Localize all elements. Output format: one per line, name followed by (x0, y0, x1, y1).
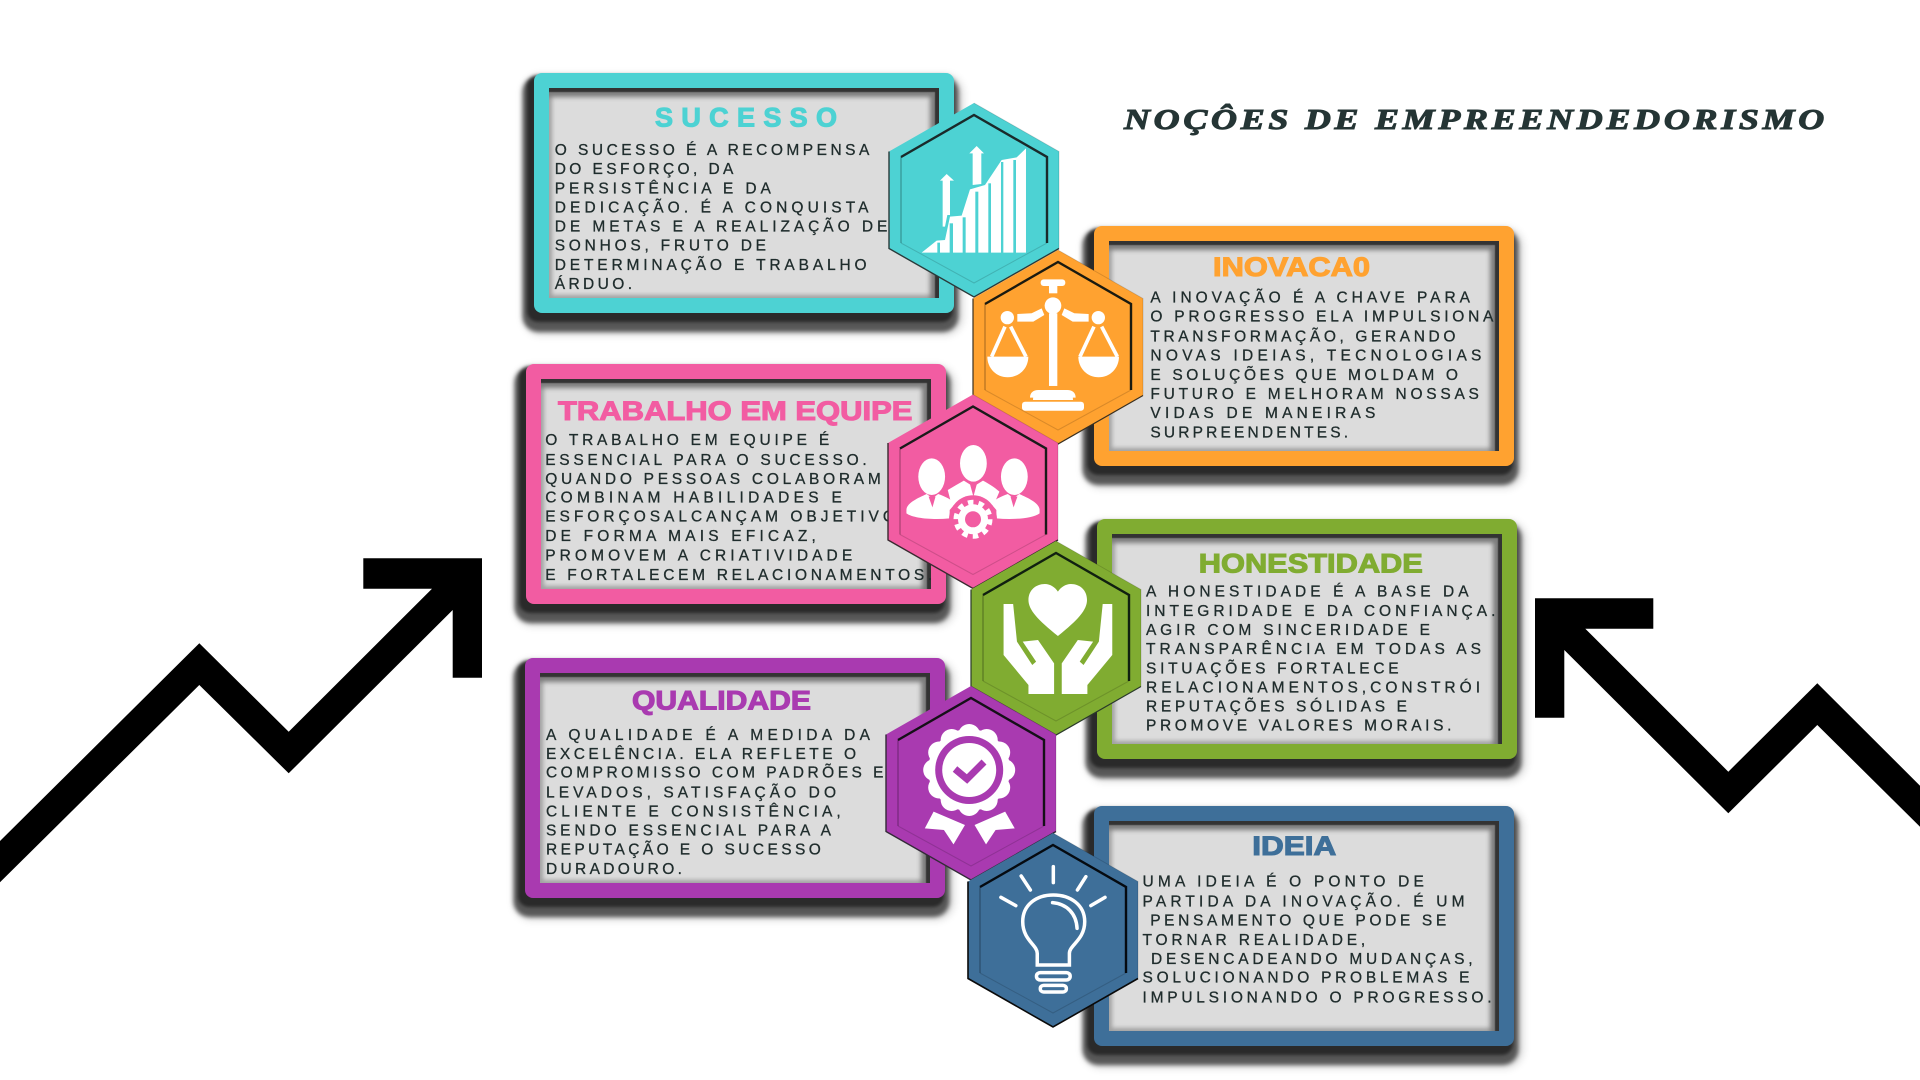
text block: ideia: TORNAR REALIDADE, (1142, 932, 1365, 949)
icon: rising bar chart (922, 146, 1026, 253)
text block: qualidade: LEVADOS, SATISFAÇÃO DO (546, 785, 836, 802)
text block: honestidade: RELACIONAMENTOS,CONSTRÓI (1146, 680, 1480, 697)
text block: honestidade: A HONESTIDADE É A BASE DA (1146, 584, 1469, 601)
text block: inovação: SURPREENDENTES. (1150, 424, 1348, 441)
hexagon: trabalho em equipe (888, 394, 1058, 588)
text block: ideia: IMPULSIONANDO O PROGRESSO. (1142, 990, 1492, 1007)
text block: trabalho em equipe: DE FORMA MAIS EFICAZ, (545, 528, 816, 545)
text block: sucesso (555, 142, 887, 293)
text block: inovação: FUTURO E MELHORAM NOSSAS (1150, 386, 1479, 403)
text block: sucesso: PERSISTÊNCIA E DA (555, 181, 772, 198)
text block: sucesso: DO ESFORÇO, DA (555, 161, 734, 178)
text block: honestidade (1146, 584, 1495, 735)
icon: team with gear (906, 445, 1040, 543)
text block: honestidade: REPUTAÇÕES SÓLIDAS E (1146, 699, 1407, 716)
heading: ideia: IDEIA (1252, 831, 1336, 861)
icon: quality rosette (923, 724, 1015, 844)
text block: trabalho em equipe: QUANDO PESSOAS COLABORAM (545, 471, 881, 488)
text block: inovação: TRANSFORMAÇÃO, GERANDO (1150, 329, 1455, 346)
text block: qualidade: SENDO ESSENCIAL PARA A (546, 823, 832, 840)
text block: qualidade: CLIENTE E CONSISTÊNCIA, (546, 804, 841, 821)
text block: qualidade: EXCELÊNCIA. ELA REFLETE O (546, 746, 856, 763)
panel: ideia (1094, 806, 1514, 1046)
heading: qualidade: QUALIDADE (632, 685, 811, 715)
text block: qualidade (546, 727, 884, 878)
hexagon: sucesso (889, 103, 1059, 297)
text block: ideia: SOLUCIONANDO PROBLEMAS E (1142, 970, 1470, 987)
text block: trabalho em equipe: O TRABALHO EM EQUIPE É (545, 432, 829, 449)
text block: ideia: DESENCADEANDO MUDANÇAS, (1151, 951, 1472, 968)
icon: scales base (1022, 390, 1084, 411)
panel: qualidade (525, 658, 945, 898)
text block: trabalho em equipe: ESFORÇOSALCANÇAM OBJETIVOS (545, 509, 909, 526)
hexagon: inovação (973, 250, 1143, 444)
hexagon: honestidade (971, 541, 1141, 735)
heading: trabalho em equipe: TRABALHO EM EQUIPE (558, 396, 912, 426)
text block: sucesso: SONHOS, FRUTO DE (555, 238, 766, 255)
text block: qualidade: COMPROMISSO COM PADRÕES E (546, 765, 884, 782)
icon: heart in hands (1004, 584, 1112, 694)
text block: ideia (1142, 874, 1492, 1007)
panel: sucesso (534, 73, 954, 313)
text block: inovação: A INOVAÇÃO É A CHAVE PARA (1150, 290, 1471, 307)
text block: trabalho em equipe: COMBINAM HABILIDADES E (545, 490, 842, 507)
heading: honestidade: HONESTIDADE (1199, 549, 1423, 579)
text block: honestidade: INTEGRIDADE E DA CONFIANÇA. (1146, 603, 1495, 620)
text block: sucesso: ÁRDUO. (555, 276, 632, 293)
text block: honestidade: PROMOVE VALORES MORAIS. (1146, 718, 1451, 735)
icon: scales of justice (987, 279, 1119, 398)
text block: inovação (1150, 290, 1494, 441)
text block: ideia: PENSAMENTO QUE PODE SE (1150, 913, 1446, 930)
text block: sucesso: DEDICAÇÃO. É A CONQUISTA (555, 200, 869, 217)
text block: honestidade: SITUAÇÕES FORTALECE (1146, 660, 1399, 677)
text block: inovação: E SOLUÇÕES QUE MOLDAM O (1150, 367, 1458, 384)
text block: trabalho em equipe: E FORTALECEM RELACIONAMENTOS. (545, 567, 932, 584)
text block: inovação: O PROGRESSO ELA IMPULSIONA (1150, 309, 1494, 326)
text block: inovação: NOVAS IDEIAS, TECNOLOGIAS (1150, 348, 1481, 365)
panel: honestidade (1097, 519, 1517, 759)
text block: sucesso: DE METAS E A REALIZAÇÃO DE (555, 219, 887, 236)
text block: trabalho em equipe (545, 432, 932, 584)
text block: trabalho em equipe: ESSENCIAL PARA O SUCESSO. (545, 452, 867, 469)
text block: honestidade: TRANSPARÊNCIA EM TODAS AS (1146, 641, 1481, 658)
text block: qualidade: A QUALIDADE É A MEDIDA DA (546, 727, 871, 744)
hexagon: ideia (968, 833, 1138, 1027)
title: NOÇÔES DE EMPREENDEDORISMO (1123, 103, 1828, 136)
heading: sucesso: SUCESSO (655, 103, 837, 133)
text block: honestidade: AGIR COM SINCERIDADE E (1146, 622, 1430, 639)
text block: sucesso: O SUCESSO É A RECOMPENSA (555, 142, 870, 159)
text block: inovação: VIDAS DE MANEIRAS (1150, 405, 1375, 422)
text block: qualidade: DURADOURO. (546, 861, 682, 878)
text block: trabalho em equipe: PROMOVEM A CRIATIVIDADE (545, 548, 852, 565)
panel: trabalho em equipe (526, 364, 946, 604)
icon: light bulb (1001, 867, 1105, 992)
hexagon: qualidade (886, 686, 1056, 880)
heading: inovação: INOVACA0 (1213, 252, 1370, 282)
text block: qualidade: REPUTAÇÃO E O SUCESSO (546, 842, 821, 859)
panel: inovação (1094, 226, 1514, 466)
text block: ideia: UMA IDEIA É O PONTO DE (1142, 874, 1424, 891)
text block: sucesso: DETERMINAÇÃO E TRABALHO (555, 257, 867, 274)
text block: ideia: PARTIDA DA INOVAÇÃO. É UM (1142, 894, 1464, 911)
